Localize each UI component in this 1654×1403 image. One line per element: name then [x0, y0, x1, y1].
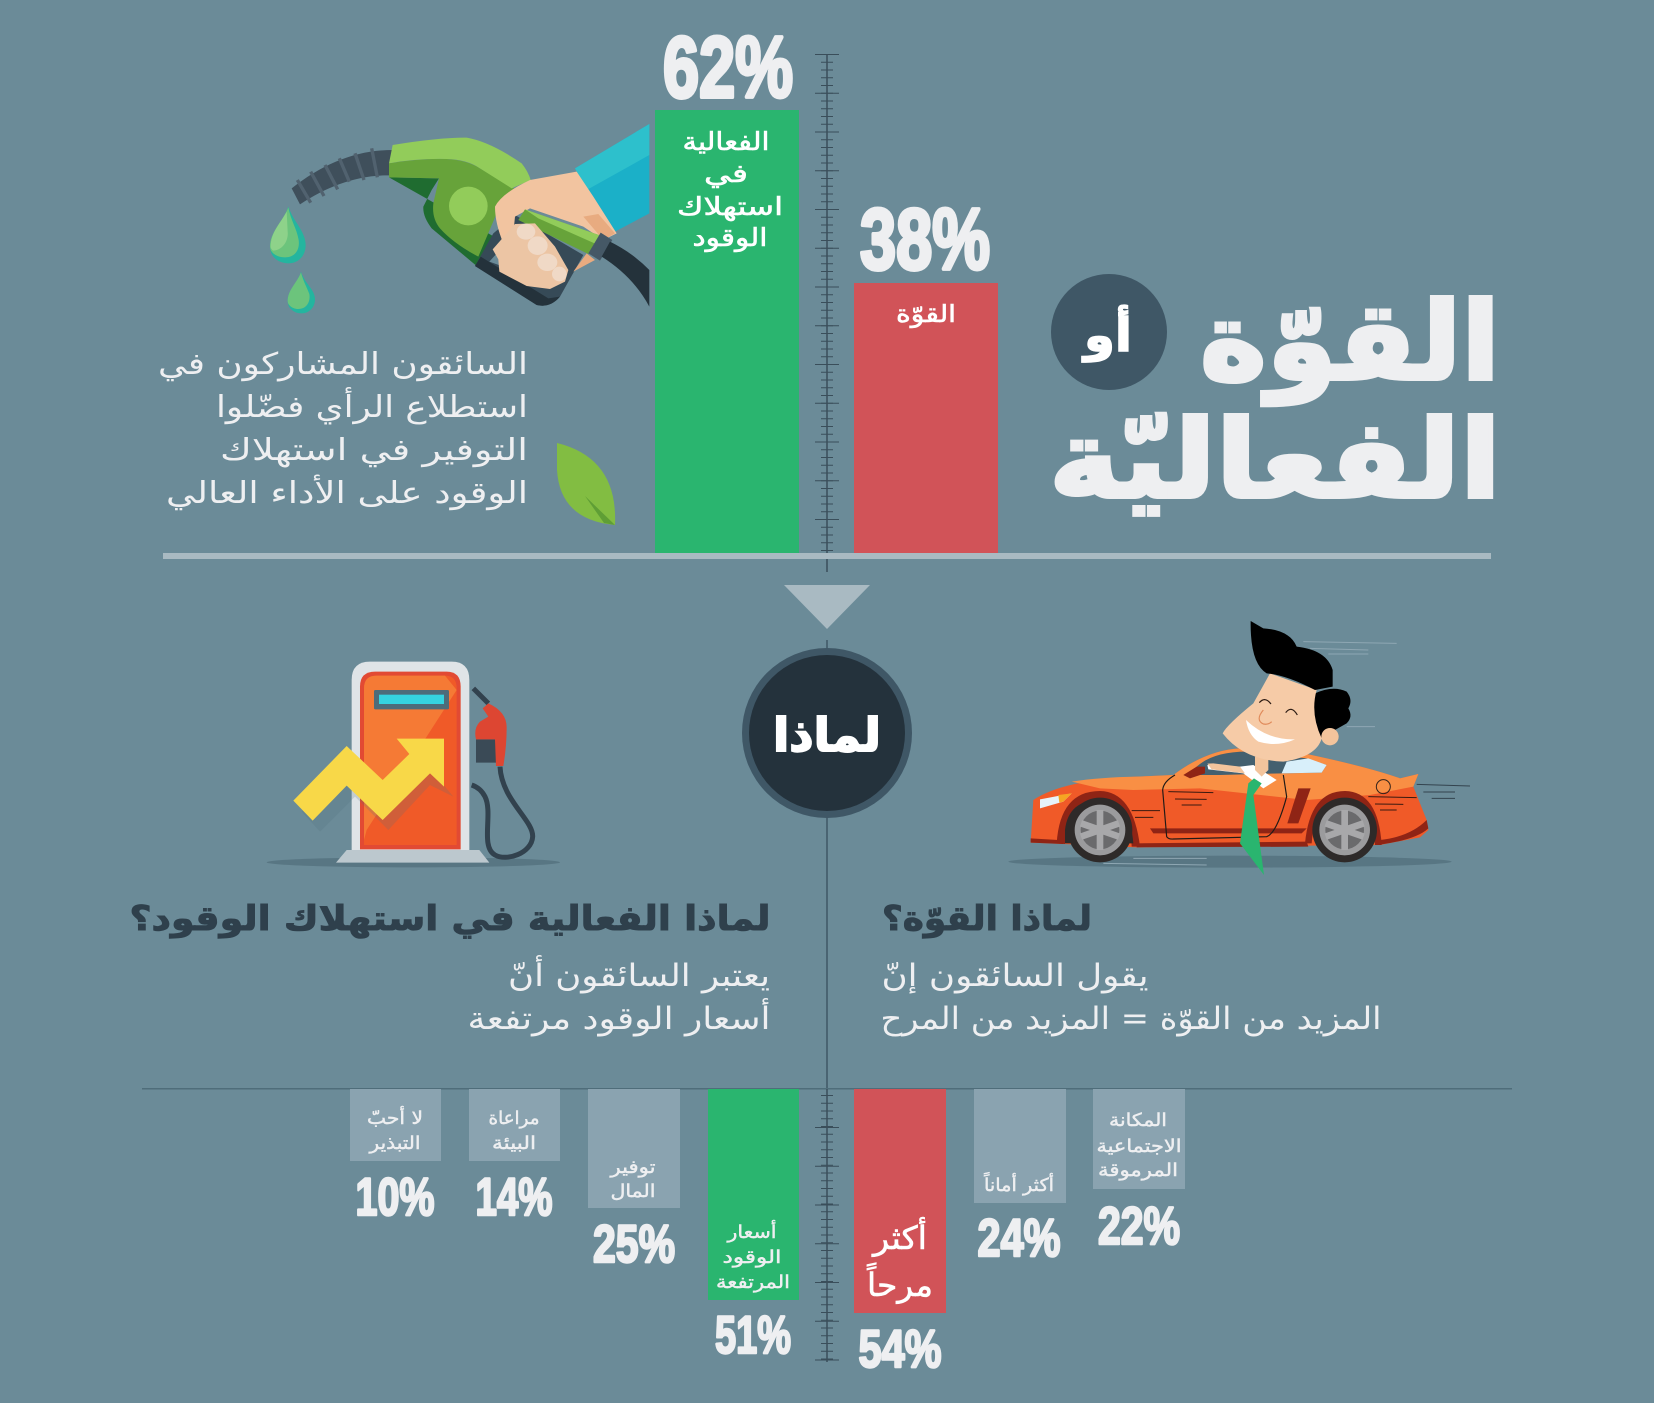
tie	[1240, 778, 1264, 875]
side mirror	[1183, 767, 1205, 778]
bar: saving money 25%: 25%	[593, 1215, 675, 1274]
bar: do not like waste 10%: التبذير	[368, 1133, 420, 1154]
icon: fuel pump with rising arrow	[267, 662, 560, 867]
heading: why power: لماذا القوّة؟	[882, 899, 1092, 939]
hose	[472, 688, 533, 857]
bar: more fun 54%: 54%	[858, 1320, 942, 1379]
front wheel arch	[1057, 791, 1140, 847]
bar: more fun 54%: مرحاً	[866, 1262, 933, 1304]
mid green body	[389, 159, 517, 257]
pump orange face	[364, 676, 457, 845]
ear	[1321, 728, 1339, 745]
title: القوّة	[1200, 280, 1500, 406]
bar: saving money 25%	[588, 1089, 680, 1274]
why badge	[742, 648, 912, 818]
rear lower strip	[1380, 820, 1428, 844]
text: why power: يقول السائقون إنّ	[882, 958, 1148, 994]
icon: smiling man in orange sports car	[1008, 621, 1470, 875]
heading: why efficiency: لماذا الفعالية في استهلاك الوقود؟	[130, 899, 770, 939]
display	[374, 690, 449, 709]
icon: leaf	[557, 443, 615, 525]
black hose	[602, 242, 649, 307]
bar: saving money 25%: توفير	[609, 1157, 656, 1178]
rising arrow	[293, 739, 444, 821]
door crease lines	[1132, 792, 1417, 817]
smile	[1246, 720, 1295, 744]
bar: fuel efficiency 62%: الفعالية	[682, 127, 770, 156]
door outline	[1163, 775, 1287, 839]
bar: power 38%	[854, 283, 998, 553]
ground shadow	[1008, 856, 1452, 868]
arm and shirt	[1207, 765, 1277, 788]
speed lines	[1103, 642, 1397, 865]
badge: or	[1051, 274, 1167, 390]
bar: saving money 25%: المال	[610, 1181, 656, 1202]
car body	[1031, 748, 1428, 847]
fingers	[493, 223, 568, 289]
bar: social status 22%	[1093, 1089, 1185, 1256]
intro paragraph: الوقود على الأداء العالي	[166, 473, 528, 511]
bar: fuel efficiency 62%: الوقود	[692, 223, 768, 252]
collar	[588, 233, 612, 261]
value: 38%: 38%	[860, 192, 990, 288]
intro paragraph: السائقون المشاركون في	[158, 347, 528, 382]
light green top	[389, 138, 531, 188]
bar: power 38%: القوّة	[896, 300, 956, 328]
bar: environment 14%	[469, 1089, 560, 1227]
nose	[1259, 710, 1272, 724]
headlight	[1040, 793, 1072, 808]
bar: environment 14%: 14%	[476, 1168, 552, 1227]
bar: social status 22%: المرموقة	[1098, 1160, 1178, 1181]
hand back	[495, 172, 617, 243]
bar: high fuel prices 51%: الوقود	[722, 1247, 782, 1268]
bar: social status 22%: 22%	[1098, 1197, 1180, 1256]
text: why efficiency	[468, 955, 770, 1037]
text: why efficiency: يعتبر السائقون أنّ	[508, 955, 770, 994]
lower center axis	[826, 640, 828, 1089]
back hair	[1311, 689, 1350, 738]
front hair	[1251, 621, 1333, 690]
text: why power: المزيد من القوّة = المزيد من المرح	[880, 1001, 1382, 1037]
bottom scale axis	[826, 1089, 828, 1362]
base	[336, 850, 489, 863]
green dial	[449, 187, 488, 225]
icon: fuel nozzle held by hand	[270, 124, 649, 313]
sleeve	[575, 124, 649, 232]
text: why power	[880, 958, 1382, 1037]
bar: do not like waste 10%: 10%	[356, 1168, 434, 1227]
bar: high fuel prices 51%: المرتفعة	[716, 1272, 790, 1293]
bar: social status 22%: المكانة	[1109, 1110, 1167, 1131]
nozzle	[475, 703, 507, 766]
bar: environment 14%: البيئة	[492, 1133, 536, 1154]
top center scale axis	[826, 54, 828, 572]
bar: environment 14%: مراعاة	[488, 1108, 540, 1129]
bar: high fuel prices 51%: أسعار	[726, 1220, 776, 1243]
title	[1049, 280, 1501, 523]
intro paragraph: التوفير في استهلاك	[220, 433, 528, 468]
value: 62%: 62%	[663, 20, 793, 116]
bar: social status 22%: الاجتماعية	[1096, 1136, 1182, 1157]
hose	[292, 148, 392, 204]
lower handle	[475, 215, 583, 306]
handle gap	[489, 252, 503, 267]
intro paragraph: استطلاع الرأي فضّلوا	[216, 386, 528, 425]
fuel cap	[1376, 780, 1390, 794]
bar: fuel efficiency 62%	[655, 110, 799, 553]
bar: high fuel prices 51%	[708, 1089, 799, 1365]
side vent	[1287, 788, 1311, 823]
bar: safer 24%: أكثر أماناً	[983, 1172, 1054, 1196]
top horizontal baseline	[163, 553, 1491, 559]
knuckles	[517, 224, 567, 281]
bar: fuel efficiency 62%: استهلاك	[677, 192, 783, 222]
front wheel	[1065, 798, 1133, 862]
bar: high fuel prices 51%: 51%	[715, 1306, 791, 1365]
bar: do not like waste 10%: لا أحبّ	[367, 1106, 423, 1129]
bar: fuel efficiency 62%: في	[704, 159, 748, 188]
why badge: لماذا	[773, 708, 881, 762]
rear wheel arch	[1305, 791, 1382, 845]
front lower strip	[1031, 838, 1063, 844]
dark green body edge	[389, 177, 500, 266]
bar: safer 24%: 24%	[978, 1209, 1060, 1268]
rear wheel	[1312, 798, 1377, 862]
arrow shadow	[302, 757, 453, 832]
ground shadow	[267, 857, 560, 867]
lever	[518, 209, 602, 254]
badge: or: أو	[1082, 305, 1132, 362]
bar: more fun 54%: أكثر	[871, 1217, 927, 1257]
eyes	[1259, 700, 1297, 715]
lower sill	[1137, 828, 1308, 847]
bar: do not like waste 10%	[350, 1089, 441, 1227]
drop large	[270, 207, 306, 263]
pump red frame	[360, 672, 461, 849]
bar: more fun 54%	[854, 1089, 946, 1379]
drop small	[288, 272, 315, 313]
intro paragraph	[158, 347, 528, 511]
neck	[1255, 757, 1268, 777]
bottom horizontal line	[142, 1088, 1512, 1090]
car upper highlight	[1072, 748, 1418, 800]
face	[1223, 673, 1322, 762]
pump body frame	[352, 662, 469, 850]
text: why efficiency: أسعار الوقود مرتفعة	[468, 998, 770, 1037]
down triangle	[784, 585, 870, 629]
bar: safer 24%	[974, 1089, 1066, 1268]
title: الفعاليّة	[1049, 398, 1501, 523]
window	[1197, 752, 1327, 775]
